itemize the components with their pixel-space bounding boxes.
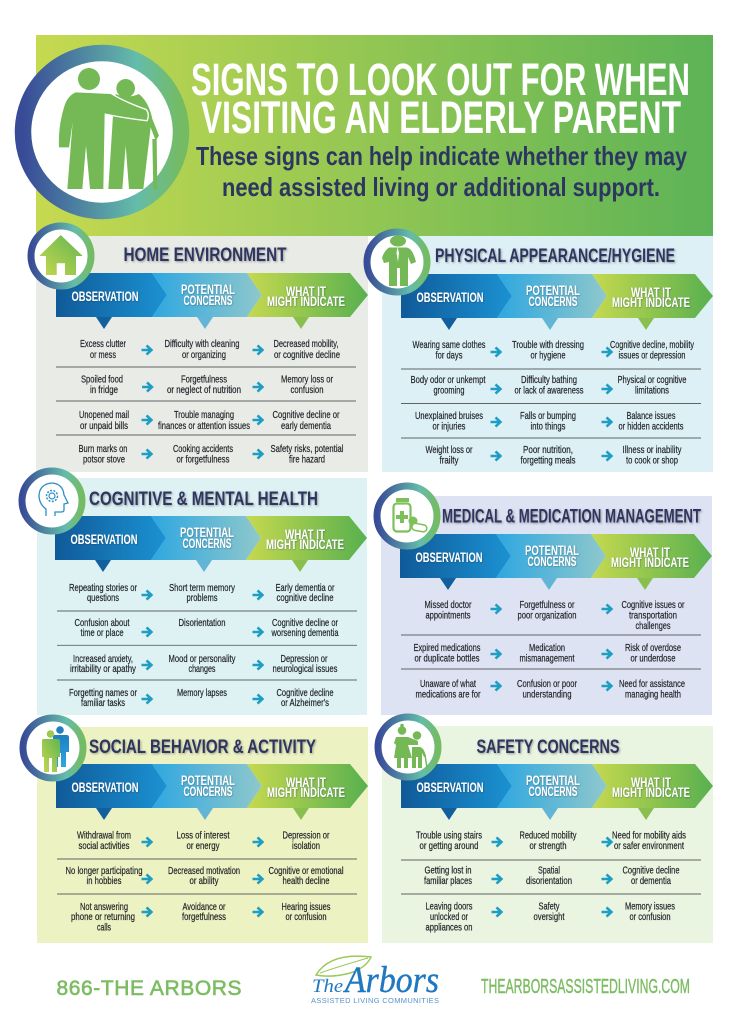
- table rows: or Alzheimer's: [281, 697, 329, 709]
- column headers: OBSERVATION: [72, 289, 138, 304]
- table rows: social activities: [78, 840, 130, 852]
- table rows: poor organization: [518, 610, 577, 622]
- subtitle: need assisted living or additional support.: [222, 172, 660, 202]
- column headers: POTENTIAL: [181, 282, 235, 297]
- table rows: Difficulty with cleaning: [164, 338, 240, 350]
- table rows: frailty: [440, 454, 459, 466]
- table rows: isolation: [292, 840, 320, 852]
- table rows: phone or returning: [71, 911, 135, 923]
- table rows: oversight: [534, 911, 565, 923]
- table rows: Falls or bumping: [520, 410, 576, 422]
- table rows: Need for assistance: [619, 678, 685, 690]
- table rows: problems: [186, 592, 218, 604]
- column headers: CONCERNS: [528, 784, 578, 799]
- table rows: Forgetfulness or: [520, 599, 575, 611]
- table rows: Withdrawal from: [77, 830, 131, 842]
- table rows: Trouble with dressing: [512, 339, 584, 351]
- table rows: or mess: [90, 349, 116, 361]
- icon: medicine bottle and pills: [377, 486, 437, 546]
- table rows: Cognitive decline or: [272, 617, 338, 629]
- table rows: Excess clutter: [80, 338, 126, 350]
- table rows: Risk of overdose: [625, 642, 681, 654]
- table rows: Forgetting names or: [69, 687, 137, 699]
- column headers: POTENTIAL: [525, 543, 579, 558]
- table rows: Loss of interest: [176, 830, 230, 842]
- logo: The Arbors: ASSISTED LIVING COMMUNITIES: [311, 996, 439, 1005]
- column headers: [56, 273, 368, 329]
- table rows: Cognitive decline: [622, 864, 680, 876]
- table rows: forgetfulness: [182, 911, 226, 923]
- table rows: Depression or: [282, 830, 330, 842]
- table rows: unlocked or: [430, 911, 468, 923]
- table rows: grooming: [434, 384, 465, 396]
- table rows: to cook or shop: [626, 454, 678, 466]
- table rows: managing health: [625, 688, 681, 700]
- column headers: MIGHT INDICATE: [611, 555, 689, 570]
- table rows: [401, 830, 701, 934]
- table rows: Safety: [538, 900, 560, 912]
- column headers: CONCERNS: [184, 293, 232, 308]
- table rows: understanding: [522, 688, 572, 700]
- table rows: forgetting meals: [520, 454, 576, 466]
- table rows: medications are for: [416, 688, 481, 700]
- table rows: irritability or apathy: [70, 663, 137, 675]
- table rows: in fridge: [90, 384, 118, 396]
- table rows: or confusion: [286, 911, 327, 923]
- table rows: or confusion: [630, 911, 671, 923]
- table rows: Hearing issues: [282, 901, 330, 913]
- table rows: Short term memory: [169, 582, 236, 594]
- table rows: Forgetfulness: [181, 374, 227, 386]
- table rows: Mood or personality: [168, 653, 236, 665]
- icon: man with tie: [367, 232, 427, 292]
- column headers: OBSERVATION: [416, 780, 484, 795]
- column headers: POTENTIAL: [526, 283, 580, 298]
- table rows: familiar tasks: [81, 697, 125, 709]
- table rows: Memory lapses: [177, 687, 227, 699]
- table rows: or unpaid bills: [80, 420, 128, 432]
- table rows: Wearing same clothes: [412, 339, 486, 351]
- table rows: Need for mobility aids: [612, 830, 686, 842]
- heading: home environment: HOME ENVIRONMENT: [124, 245, 287, 266]
- table rows: or underdose: [630, 652, 676, 664]
- table rows: appliances on: [426, 922, 473, 934]
- table rows: Decreased mobility,: [274, 338, 338, 350]
- logo: The Arbors: [311, 956, 439, 1005]
- icon: house: [31, 226, 91, 286]
- table rows: Depression or: [280, 653, 328, 665]
- column headers: POTENTIAL: [180, 525, 234, 540]
- table rows: Not answering: [80, 901, 128, 913]
- column headers: MIGHT INDICATE: [612, 295, 690, 310]
- table rows: Balance issues: [626, 410, 676, 422]
- column headers: [56, 764, 368, 820]
- table rows: Poor nutrition,: [523, 444, 573, 456]
- icon: caregiver and elderly parent: [23, 53, 181, 211]
- table rows: or organizing: [182, 349, 226, 361]
- table rows: or duplicate bottles: [414, 652, 480, 664]
- column headers: MIGHT INDICATE: [267, 294, 345, 309]
- table rows: Trouble managing: [174, 409, 234, 421]
- table rows: health decline: [282, 875, 330, 887]
- table rows: early dementia: [281, 420, 331, 432]
- column headers: OBSERVATION: [70, 532, 138, 547]
- main title: [191, 54, 690, 143]
- column headers: CONCERNS: [184, 784, 232, 799]
- table rows: Repeating stories or: [69, 582, 137, 594]
- table rows: familiar places: [424, 875, 472, 887]
- table rows: or ability: [190, 875, 219, 887]
- table rows: or neglect of nutrition: [167, 384, 241, 396]
- table rows: changes: [188, 663, 216, 675]
- table rows: Burn marks on: [78, 443, 128, 455]
- heading: cognitive and mental health: COGNITIVE & MENTAL HEALTH: [89, 489, 318, 510]
- table rows: Confusion about: [74, 617, 130, 629]
- table rows: calls: [97, 922, 111, 934]
- column headers: MIGHT INDICATE: [267, 785, 345, 800]
- table rows: or strength: [530, 840, 567, 852]
- logo: The Arbors: Arbors: [342, 960, 439, 1001]
- column headers: [55, 516, 367, 572]
- table rows: Unopened mail: [79, 409, 129, 421]
- table rows: [57, 830, 357, 934]
- table rows: limitations: [635, 384, 669, 396]
- column headers: [400, 534, 712, 590]
- table rows: Spoiled food: [81, 374, 123, 386]
- icon: elderly couple: [378, 717, 438, 777]
- table rows: neurological issues: [272, 663, 338, 675]
- table rows: into things: [530, 420, 566, 432]
- panel: cognitive and mental health: [22, 471, 367, 715]
- table rows: Cognitive decline or: [272, 409, 340, 421]
- column headers: MIGHT INDICATE: [612, 785, 690, 800]
- table rows: Decreased motivation: [168, 865, 240, 877]
- column headers: WHAT IT: [286, 284, 327, 299]
- column headers: CONCERNS: [528, 294, 578, 309]
- table rows: confusion: [290, 384, 324, 396]
- table rows: Missed doctor: [424, 599, 472, 611]
- table rows: finances or attention issues: [158, 420, 250, 432]
- table rows: or energy: [186, 840, 220, 852]
- table rows: or injuries: [432, 420, 466, 432]
- table rows: appointments: [426, 610, 470, 622]
- column headers: OBSERVATION: [72, 780, 138, 795]
- table rows: transportation: [629, 610, 677, 622]
- table rows: or dementia: [631, 875, 671, 887]
- table rows: Trouble using stairs: [416, 830, 482, 842]
- table rows: disorientation: [526, 875, 572, 887]
- icon: head with gear: [22, 471, 82, 531]
- column headers: WHAT IT: [631, 285, 672, 300]
- panel: physical appearance and hygiene: [367, 232, 713, 472]
- heading: social behavior and activity: SOCIAL BEHAVIOR & ACTIVITY: [89, 737, 316, 758]
- table rows: or getting around: [420, 840, 479, 852]
- column headers: MIGHT INDICATE: [266, 537, 344, 552]
- column headers: POTENTIAL: [181, 773, 235, 788]
- heading: safety concerns: SAFETY CONCERNS: [476, 737, 620, 758]
- panel: social behavior and activity: [23, 718, 368, 943]
- table rows: Early dementia or: [276, 582, 335, 594]
- table rows: Spatial: [538, 864, 560, 876]
- table rows: Confusion or poor: [517, 678, 577, 690]
- table rows: or safer environment: [614, 840, 684, 852]
- subtitle: [196, 141, 687, 202]
- table rows: Illness or inability: [622, 444, 682, 456]
- column headers: WHAT IT: [630, 545, 671, 560]
- logo: The Arbors: The: [312, 976, 343, 997]
- table rows: Getting lost in: [424, 864, 472, 876]
- column headers: WHAT IT: [285, 527, 326, 542]
- table rows: [401, 599, 701, 700]
- column headers: [401, 764, 713, 820]
- table rows: or hygiene: [530, 350, 566, 362]
- table rows: or cognitive decline: [274, 349, 340, 361]
- table rows: potsor stove: [83, 454, 125, 466]
- column headers: CONCERNS: [182, 536, 232, 551]
- table rows: for days: [436, 350, 462, 362]
- table rows: Memory issues: [625, 900, 675, 912]
- table rows: [57, 582, 357, 709]
- table rows: cognitive decline: [276, 592, 334, 604]
- panel: medical and medication management: [377, 486, 712, 715]
- table rows: No longer participating: [66, 865, 143, 877]
- table rows: or lack of awareness: [514, 384, 584, 396]
- column headers: WHAT IT: [631, 775, 672, 790]
- table rows: Reduced mobility: [520, 830, 577, 842]
- table rows: Expired medications: [414, 642, 480, 654]
- table rows: Memory loss or: [281, 374, 333, 386]
- footer: phone number: 866-THE ARBORS: [56, 977, 242, 1000]
- table rows: in hobbies: [86, 875, 122, 887]
- table rows: questions: [87, 592, 119, 604]
- table rows: Weight loss or: [426, 444, 473, 456]
- table rows: [56, 338, 356, 466]
- table rows: Cognitive or emotional: [268, 865, 344, 877]
- table rows: issues or depression: [618, 350, 686, 362]
- panel: home environment: [31, 226, 368, 472]
- table rows: Difficulty bathing: [521, 374, 577, 386]
- table rows: Cognitive issues or: [622, 599, 685, 611]
- table rows: Unaware of what: [420, 678, 476, 690]
- table rows: worsening dementia: [271, 627, 339, 639]
- table rows: fire hazard: [289, 454, 325, 466]
- table rows: Cooking accidents: [173, 443, 233, 455]
- table rows: or hidden accidents: [618, 420, 684, 432]
- header banner: [36, 35, 713, 236]
- table rows: Unexplained bruises: [415, 410, 483, 422]
- table rows: Medication: [529, 642, 565, 654]
- table rows: Body odor or unkempt: [410, 374, 486, 386]
- icon: two people: [23, 718, 83, 778]
- table rows: or forgetfulness: [176, 454, 230, 466]
- table rows: Leaving doors: [426, 900, 472, 912]
- table rows: Safety risks, potential: [270, 443, 344, 455]
- column headers: OBSERVATION: [416, 290, 484, 305]
- column headers: OBSERVATION: [416, 550, 482, 565]
- table rows: time or place: [80, 627, 124, 639]
- table rows: [401, 339, 701, 466]
- column headers: CONCERNS: [528, 554, 576, 569]
- table rows: Cognitive decline: [276, 687, 334, 699]
- table rows: mismanagement: [520, 652, 575, 664]
- table rows: Avoidance or: [182, 901, 226, 913]
- column headers: [401, 274, 713, 330]
- column headers: POTENTIAL: [526, 773, 580, 788]
- table rows: Increased anxiety,: [73, 653, 133, 665]
- table rows: Physical or cognitive: [618, 374, 687, 386]
- table rows: Disorientation: [178, 617, 226, 629]
- table rows: challenges: [636, 620, 670, 632]
- panel: safety concerns: [378, 717, 713, 943]
- column headers: WHAT IT: [286, 775, 327, 790]
- table rows: Cognitive decline, mobility: [610, 339, 695, 351]
